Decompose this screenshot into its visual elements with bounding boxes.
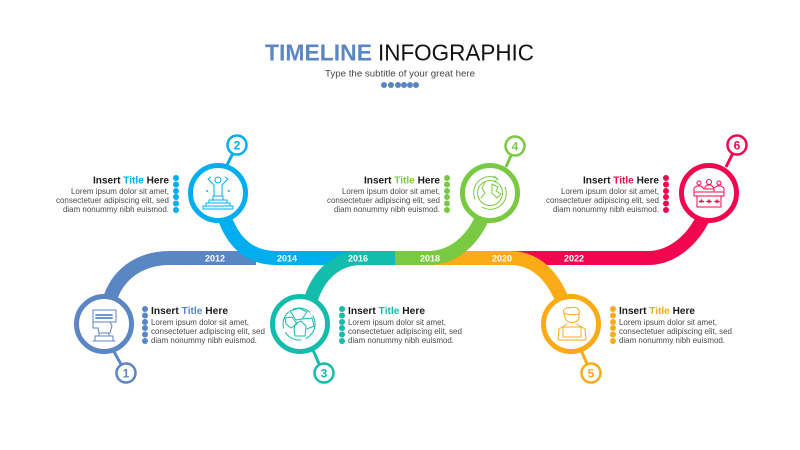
milestone 2: 2 <box>234 138 241 152</box>
text 6: consectetuer adipiscing elit, sed <box>546 195 659 205</box>
year labels: 2018 <box>420 254 440 264</box>
text 4: consectetuer adipiscing elit, sed <box>327 195 440 205</box>
milestone 6: 6 <box>734 138 741 152</box>
icon: joined hands <box>283 308 315 340</box>
title dots <box>381 82 419 88</box>
text 5: diam nonummy nibh euismod. <box>619 335 725 345</box>
year labels: 2020 <box>492 254 512 264</box>
milestone 3: 3 <box>321 366 328 380</box>
text 5 <box>610 305 732 345</box>
subtitle: Type the subtitle of your great here <box>325 68 475 80</box>
text 4: Lorem ipsum dolor sit amet, <box>342 186 440 196</box>
milestone 5 <box>544 296 600 382</box>
milestone 4 <box>462 136 524 220</box>
timeline band <box>109 216 704 302</box>
segment: green 2018 <box>395 216 483 258</box>
year labels: 2016 <box>348 254 368 264</box>
year labels: 2012 <box>205 254 225 264</box>
text 2: Insert Title Here <box>93 174 169 186</box>
text 3: diam nonummy nibh euismod. <box>348 335 454 345</box>
text 1: Lorem ipsum dolor sit amet, <box>151 317 249 327</box>
text 4: Insert Title Here <box>364 174 440 186</box>
segment: cyan 2014 <box>224 216 362 258</box>
text 5: Lorem ipsum dolor sit amet, <box>619 317 717 327</box>
icon: person on podium <box>203 177 233 209</box>
icon: hand holding paper <box>93 310 116 341</box>
milestone 3 <box>272 296 334 382</box>
year labels: 2014 <box>277 254 297 264</box>
year labels: 2022 <box>564 254 584 264</box>
segment: orange 2020 <box>430 258 563 302</box>
title: INFOGRAPHIC <box>378 40 534 66</box>
text 4: diam nonummy nibh euismod. <box>334 204 440 214</box>
milestone 4: 4 <box>512 140 519 154</box>
segment: teal 2016 <box>310 258 395 302</box>
text 6: Insert Title Here <box>583 174 659 186</box>
icon: person with laptop <box>558 307 586 340</box>
text 6: diam nonummy nibh euismod. <box>553 204 659 214</box>
text 3: Lorem ipsum dolor sit amet, <box>348 317 446 327</box>
text 4 <box>327 174 450 214</box>
milestone 2 <box>190 136 246 220</box>
text 1: consectetuer adipiscing elit, sed <box>151 326 265 336</box>
milestone 1 <box>76 296 136 382</box>
text 3 <box>339 305 462 345</box>
icon: globe with arrows <box>474 176 506 209</box>
text 1 <box>142 305 265 345</box>
segment: red 2022 <box>500 216 704 258</box>
icon: judges panel <box>694 180 724 207</box>
year labels <box>205 254 584 264</box>
text 2: Lorem ipsum dolor sit amet, <box>71 186 169 196</box>
text 6: Lorem ipsum dolor sit amet, <box>561 186 659 196</box>
title <box>265 40 534 66</box>
text 2 <box>56 174 179 214</box>
text 3: Insert Title Here <box>348 305 425 317</box>
text 1: Insert Title Here <box>151 305 228 317</box>
text 5: consectetuer adipiscing elit, sed <box>619 326 732 336</box>
segment: blue 2012 <box>109 258 256 302</box>
text 3: consectetuer adipiscing elit, sed <box>348 326 462 336</box>
text 5: Insert Title Here <box>619 305 695 317</box>
milestone 5: 5 <box>588 366 595 380</box>
text 2: consectetuer adipiscing elit, sed <box>56 195 169 205</box>
text 6 <box>546 174 669 214</box>
title: TIMELINE <box>265 40 372 66</box>
text 1: diam nonummy nibh euismod. <box>151 335 257 345</box>
milestone 6 <box>682 136 746 220</box>
milestone 1: 1 <box>123 366 130 380</box>
text 2: diam nonummy nibh euismod. <box>63 204 169 214</box>
